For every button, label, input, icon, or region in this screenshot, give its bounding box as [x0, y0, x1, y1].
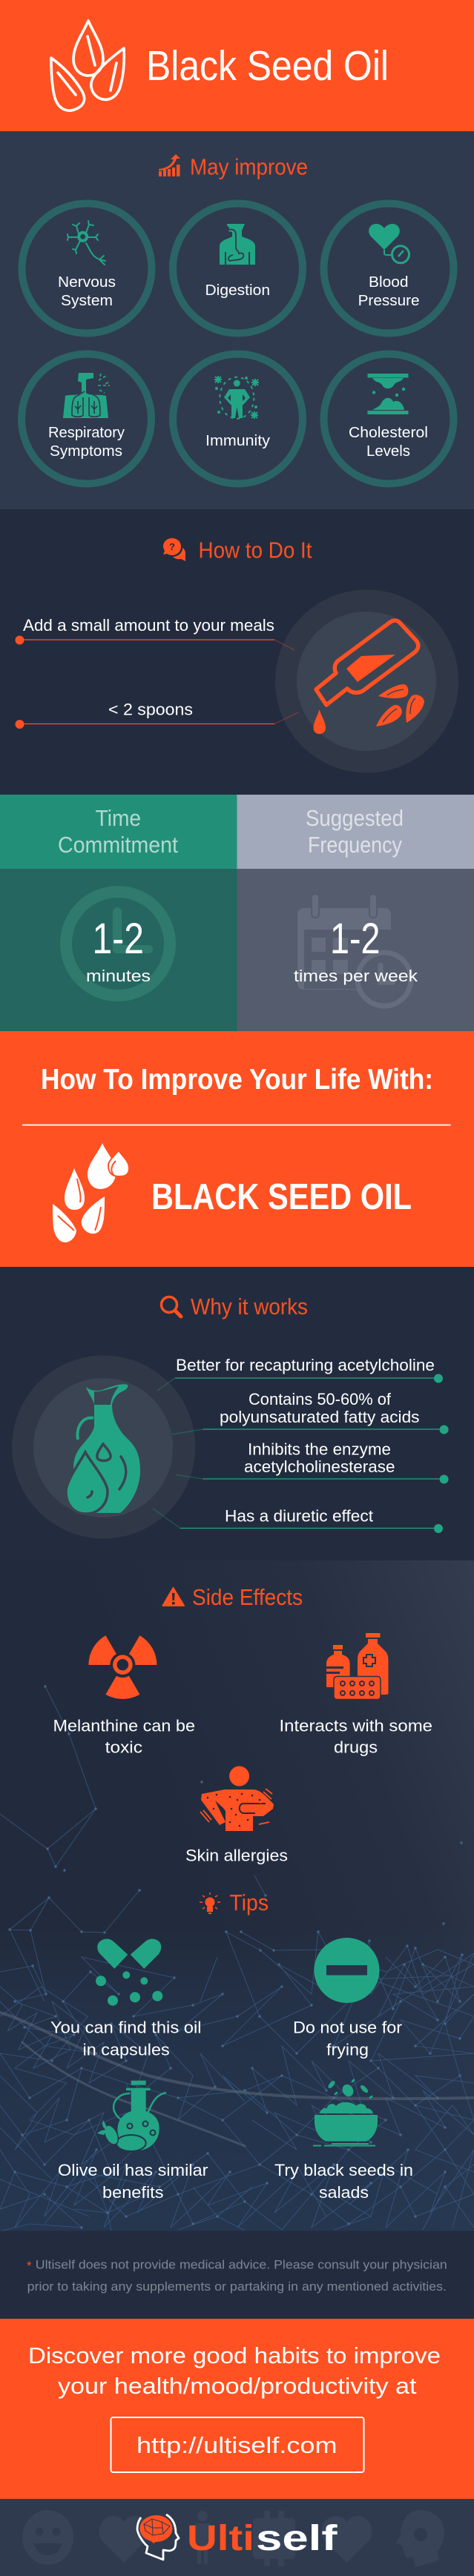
item: interacts with drugs — [279, 1633, 432, 1757]
icon: seeds and drops — [53, 1143, 129, 1242]
item: salads: salads — [319, 2183, 369, 2202]
item: no frying — [293, 1938, 402, 2059]
logo: self — [256, 2519, 338, 2558]
callout: small amount: Add a small amount to your meals — [23, 616, 274, 635]
wordmark: Ulti — [187, 2519, 254, 2558]
icon: heart gauge — [369, 224, 409, 263]
callout: small amount — [15, 616, 294, 650]
callout: enzyme: Inhibits the enzyme — [248, 1440, 391, 1459]
icon: neuron — [68, 221, 105, 265]
icon: bottle — [313, 620, 424, 734]
icon: protected figure — [214, 376, 259, 419]
icon: lungs — [63, 373, 110, 418]
panel: disclaimer: Ultiself does not provide medical advice. Please consult your physician — [36, 2258, 447, 2271]
panel: disclaimer: * — [27, 2259, 32, 2273]
icon: medicines — [326, 1633, 389, 1699]
callout: spoons — [15, 700, 298, 729]
callout: diuretic: Has a diuretic effect — [225, 1506, 373, 1526]
panel: how to do it — [0, 509, 474, 795]
heading: how to do it: ? — [169, 541, 175, 552]
ring: cholesterol levels — [323, 354, 454, 483]
label: Nervous — [58, 274, 116, 291]
value: times per week: 1-2 — [330, 915, 380, 963]
icons: faint habit symbols — [22, 2510, 444, 2567]
callout: fatty acids: polyunsaturated fatty acids — [220, 1408, 420, 1426]
panel: footer — [0, 2499, 474, 2576]
panel: suggested frequency — [237, 795, 474, 1031]
panel: disclaimer — [0, 2231, 474, 2319]
panel: time commitment — [0, 795, 237, 1031]
ring: cholesterol levels: Levels — [366, 443, 410, 460]
callout: spoons: < 2 spoons — [108, 700, 193, 719]
callout: fatty acids: Contains 50-60% of — [248, 1390, 392, 1408]
ring: blood pressure — [323, 203, 454, 334]
url button: http://ultiself.com — [136, 2432, 337, 2458]
panel: disclaimer: prior to taking any supplements or partaking in any mentioned activities. — [27, 2279, 447, 2294]
label: Digestion — [205, 282, 270, 299]
heading: time commitment: Commitment — [58, 832, 178, 858]
icon: three seeds outline — [51, 21, 124, 110]
ring: respiratory symptoms — [22, 354, 151, 483]
label: Cholesterol — [349, 424, 428, 441]
icon: olive oil jar — [97, 2081, 166, 2151]
text: discover more: Discover more good habits to improve — [28, 2342, 441, 2368]
icon: capsules — [96, 1938, 162, 2006]
label: Interacts with some — [279, 1717, 432, 1735]
item: interacts with drugs: drugs — [334, 1738, 378, 1757]
ring: digestion — [173, 203, 303, 334]
callout: enzyme: acetylcholinesterase — [244, 1457, 395, 1476]
illustration: pouring oil — [275, 590, 458, 772]
callout: fatty acids — [172, 1390, 449, 1434]
icon: salad bowl — [313, 2079, 378, 2147]
logo — [137, 2514, 338, 2560]
callout: acetylcholine — [157, 1356, 443, 1391]
label: Olive oil has similar — [58, 2161, 208, 2179]
panel: side effects and tips background — [0, 1560, 474, 2231]
heading: suggested frequency: Frequency — [308, 832, 402, 858]
label: Try black seeds in — [274, 2161, 413, 2179]
item: melanthine toxic — [53, 1635, 195, 1757]
callout: diuretic — [153, 1506, 443, 1533]
heading: time commitment — [58, 805, 178, 858]
item: melanthine toxic: toxic — [105, 1738, 142, 1757]
heading: why it works: Why it works — [191, 1294, 308, 1320]
icon: torso with stomach — [220, 224, 255, 265]
item: salads — [274, 2079, 413, 2202]
heading: tips — [200, 1890, 269, 1916]
item: capsules: in capsules — [83, 2040, 170, 2059]
value: minutes — [86, 915, 151, 985]
heading: side effects: Side Effects — [192, 1584, 303, 1610]
value: minutes: 1-2 — [92, 915, 144, 963]
section: side effects — [53, 1584, 432, 1865]
label: Respiratory — [48, 424, 125, 441]
text: discover more: your health/mood/productivity at — [58, 2373, 417, 2399]
heading: how to do it: How to Do It — [199, 537, 312, 563]
url button — [111, 2417, 363, 2472]
illustration: oil jug — [12, 1355, 195, 1539]
heading: black seed oil: BLACK SEED OIL — [151, 1177, 412, 1217]
panel: may improve — [0, 131, 474, 509]
value: times per week: times per week — [294, 967, 418, 985]
callout: enzyme — [176, 1440, 449, 1484]
label: Do not use for — [293, 2018, 402, 2037]
icon: faint clock — [66, 892, 170, 996]
title: Black Seed Oil — [146, 42, 389, 90]
heading: suggested frequency — [306, 805, 404, 858]
icon: brain in head — [137, 2514, 179, 2560]
item: olive oil: benefits — [102, 2183, 163, 2202]
ring: blood pressure: Pressure — [358, 292, 420, 309]
text: discover more — [28, 2342, 441, 2399]
heading: how to improve your life: How To Improve Your Life With: — [41, 1064, 433, 1096]
heading: tips: Tips — [230, 1890, 269, 1916]
label: Melanthine can be — [53, 1717, 195, 1735]
ring: immunity — [173, 354, 303, 483]
icon: faint calendar — [297, 894, 411, 1006]
label: Blood — [369, 274, 408, 291]
item: olive oil — [58, 2081, 208, 2202]
label: Skin allergies — [185, 1846, 288, 1865]
heading: may improve: May improve — [190, 154, 308, 179]
banner: how to improve — [0, 1031, 474, 1267]
icon: no entry — [315, 1938, 380, 2003]
label: Immunity — [205, 432, 271, 449]
icon: radiation — [88, 1635, 157, 1699]
value: minutes: minutes — [86, 967, 151, 985]
icon: jug and drop — [66, 1384, 140, 1514]
item: capsules — [50, 1938, 202, 2059]
panel: call to action — [0, 2319, 474, 2499]
header banner — [0, 0, 474, 131]
callout: acetylcholine: Better for recapturing acetylcholine — [176, 1356, 435, 1374]
section: tips — [50, 1890, 413, 2202]
panel: why it works — [0, 1267, 474, 1560]
icon: itching person — [200, 1766, 274, 1831]
ring: nervous system: System — [61, 292, 113, 309]
ring: nervous system — [22, 203, 151, 334]
value: times per week — [294, 915, 418, 985]
heading: time commitment: Time — [96, 805, 141, 831]
ring: respiratory symptoms: Symptoms — [50, 443, 122, 460]
item: no frying: frying — [326, 2040, 369, 2059]
icon: clogged artery — [368, 374, 408, 414]
item: skin allergies — [185, 1766, 288, 1865]
label: You can find this oil — [50, 2018, 202, 2037]
heading: suggested frequency: Suggested — [306, 805, 404, 831]
